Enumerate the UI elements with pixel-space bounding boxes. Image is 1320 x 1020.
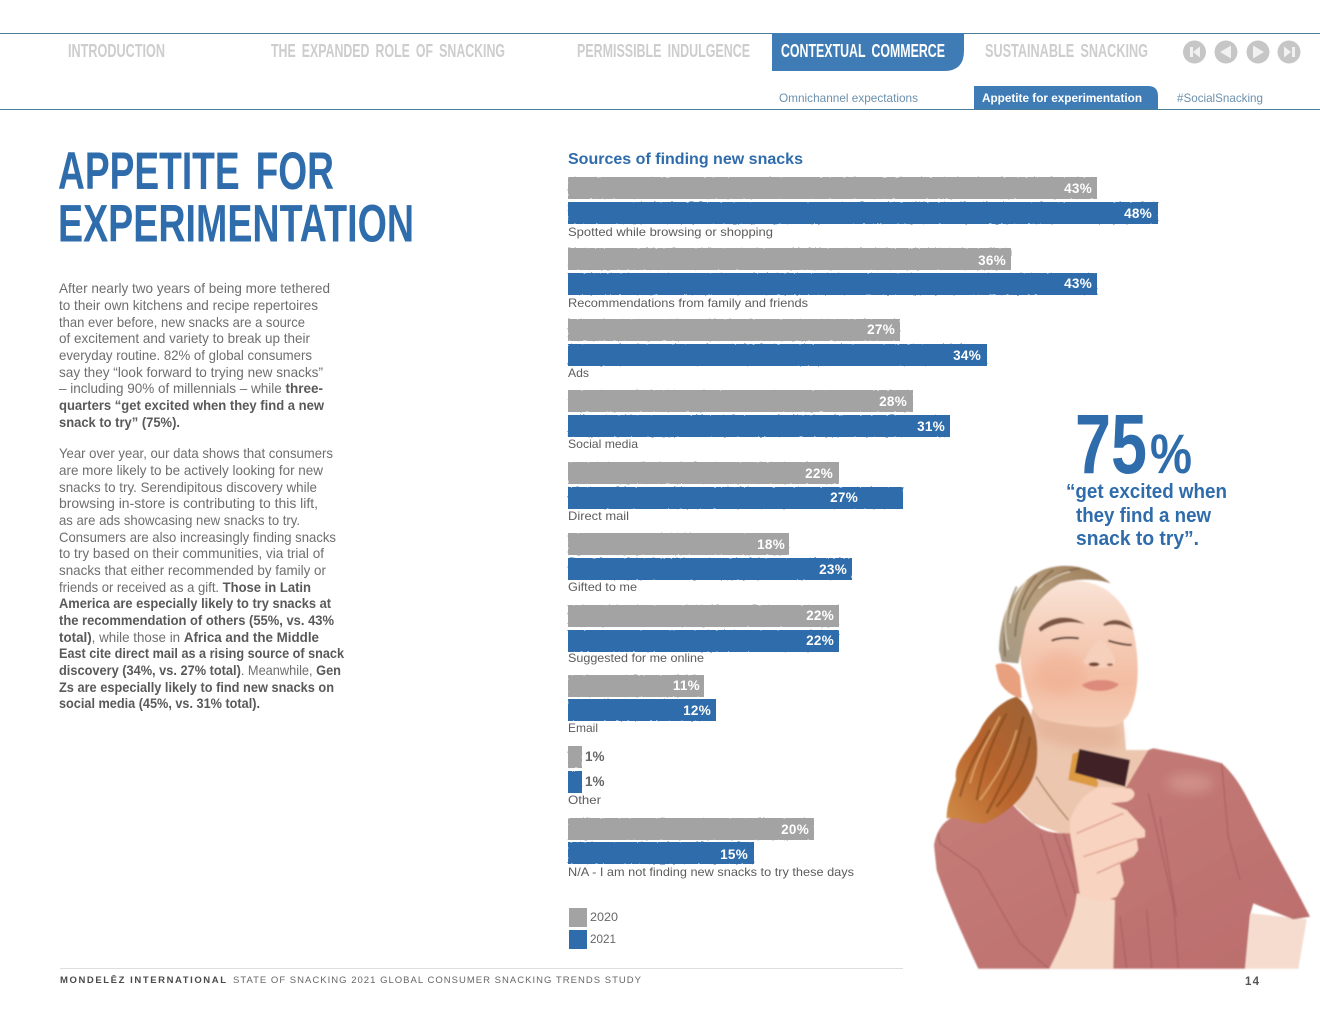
row: email — [568, 675, 716, 735]
text block: first paragraph: quarters “get excited when they find a new — [59, 397, 324, 413]
text block: second paragraph: Consumers are also increasingly finding snacks — [59, 529, 336, 545]
row: other: 1% — [585, 774, 605, 789]
callout: 75 percent: snack to try”. — [1076, 528, 1199, 550]
blouse folds — [938, 763, 1240, 968]
row: ads: Ads — [568, 366, 589, 380]
row: ads — [568, 319, 987, 380]
row: social media: 31% — [917, 419, 945, 434]
row: spotted while browsing: 48% — [1124, 206, 1152, 221]
text block: second paragraph: Zs are especially likely to find new snacks on — [59, 679, 334, 695]
callout: 75 percent: “get excited when — [1066, 481, 1227, 503]
nav item: introduction: INTRODUCTION — [68, 40, 165, 61]
row: suggested online: Suggested for me online — [568, 651, 704, 665]
eyes — [1052, 638, 1132, 645]
eyebrows — [1038, 618, 1085, 632]
row: spotted while browsing — [568, 177, 1158, 239]
chocolate — [1075, 749, 1130, 787]
row: recommendations: Recommendations from family and friends — [568, 296, 808, 310]
row: recommendations — [568, 248, 1097, 310]
row: suggested online: 22% — [806, 608, 834, 623]
hair top — [999, 566, 1111, 663]
text block: second paragraph: snacks that either recommended by family or — [59, 562, 326, 578]
callout: 75 percent: they find a new — [1076, 505, 1211, 527]
row: direct mail — [568, 462, 903, 523]
text block: first paragraph: snack to try” (75%). — [59, 414, 180, 430]
text block: second paragraph: the recommendation of others (55%, vs. 43% — [59, 612, 335, 628]
face — [1020, 581, 1138, 727]
text block: first paragraph: to their own kitchens and recipe repertoires — [59, 297, 318, 313]
icon: next page button — [1246, 40, 1270, 64]
nav item: permissible indulgence: PERMISSIBLE INDULGENCE — [577, 40, 750, 61]
row: gifted to me — [568, 533, 852, 594]
bar chart: sources of finding new snacks — [568, 177, 1158, 879]
row: email: 11% — [673, 678, 700, 693]
row: not finding new snacks: N/A - I am not finding new snacks to try these days — [568, 865, 854, 879]
nav item: expanded role: THE EXPANDED ROLE OF SNACKING — [271, 40, 505, 61]
subnav tab: appetite for experimentation active: Appetite for experimentation — [982, 91, 1142, 105]
navigation bar — [0, 33, 1320, 110]
cheek blush — [1035, 652, 1085, 695]
row: social media: Social media — [568, 437, 638, 451]
text block: second paragraph: friends or received as a gift. Those in Latin — [59, 579, 311, 595]
blouse — [934, 748, 1310, 969]
row: email: 12% — [683, 703, 711, 718]
text block: second paragraph: East cite direct mail as a rising source of snack — [59, 645, 344, 661]
subnav tab: appetite for experimentation active — [974, 86, 1158, 109]
title — [58, 142, 414, 254]
row: direct mail: Direct mail — [568, 509, 629, 523]
footer study title: STATE OF SNACKING 2021 GLOBAL CONSUMER SNACKING TRENDS STUDY — [233, 975, 642, 986]
row: ads: 34% — [953, 348, 981, 363]
row: gifted to me: Gifted to me — [568, 580, 637, 594]
forearm — [1049, 893, 1115, 969]
text block: first paragraph: – including 90% of millennials – while three- — [59, 380, 323, 396]
nav tab: contextual commerce active — [772, 33, 964, 71]
callout: 75 percent: % — [1150, 422, 1192, 485]
text block: second paragraph: social media (45%, vs. 31% total). — [59, 695, 260, 711]
icon: last page button — [1278, 40, 1300, 64]
neck and chest — [1007, 700, 1150, 837]
far arm — [1245, 913, 1307, 969]
text block: first paragraph: of excitement and variety to break up their — [59, 330, 310, 346]
row: email: Email — [568, 721, 598, 735]
row: gifted to me: 18% — [757, 537, 785, 552]
biscuit — [1068, 750, 1098, 787]
title: APPETITE FOR — [58, 142, 334, 201]
row: recommendations: 43% — [1064, 276, 1092, 291]
text block: second paragraph: Year over year, our data shows that consumers — [59, 445, 333, 461]
text block: second paragraph: to try based on their communities, via trial of — [59, 545, 324, 561]
callout: 75 percent — [1066, 397, 1227, 550]
legend — [569, 908, 618, 949]
row: suggested online: 22% — [806, 633, 834, 648]
neck shadow — [1033, 710, 1120, 749]
row: not finding new snacks: 15% — [720, 847, 748, 862]
text block: first paragraph: say they “look forward to trying new snacks” — [59, 364, 323, 380]
row: other: 1% — [585, 749, 605, 764]
row: gifted to me: 23% — [819, 562, 847, 577]
row: direct mail: 22% — [805, 466, 833, 481]
row: other — [568, 746, 605, 807]
nav tab: contextual commerce active: CONTEXTUAL COMMERCE — [781, 40, 945, 61]
page number: 14 — [1245, 976, 1260, 988]
chart title: Sources of finding new snacks — [568, 151, 803, 168]
row: direct mail: 27% — [830, 490, 858, 505]
row: not finding new snacks: 20% — [781, 822, 809, 837]
icon: first page button — [1183, 40, 1206, 64]
ear — [995, 663, 1022, 698]
row: spotted while browsing: 43% — [1064, 181, 1092, 196]
subnav: omnichannel expectations: Omnichannel expectations — [779, 91, 918, 105]
title: EXPERIMENTATION — [58, 194, 414, 254]
text block: second paragraph: discovery (34%, vs. 27% total). Meanwhile, Gen — [59, 662, 341, 678]
icon: previous page button — [1214, 40, 1238, 64]
lips — [1082, 680, 1119, 691]
text block: first paragraph: everyday routine. 82% of global consumers — [59, 347, 312, 363]
photo: woman tasting a chocolate biscuit — [934, 566, 1310, 969]
row: ads: 27% — [867, 322, 895, 337]
legend: 2020 — [590, 910, 618, 924]
text block: second paragraph: as are ads showcasing new snacks to try. — [59, 512, 300, 528]
callout: 75 percent: 75 — [1075, 397, 1147, 491]
text block: second paragraph: are more likely to be actively looking for new — [59, 462, 324, 478]
text block: second paragraph: snacks to try. Serendipitous discovery while — [59, 479, 317, 495]
nav item: sustainable snacking: SUSTAINABLE SNACKING — [985, 40, 1148, 61]
hand creases — [1077, 813, 1137, 873]
footer brand: MONDELĒZ INTERNATIONAL — [60, 975, 226, 986]
row: not finding new snacks — [568, 818, 854, 879]
footer — [60, 968, 1260, 988]
text block: first paragraph: than ever before, new snacks are a source — [59, 314, 305, 330]
text block: second paragraph: total), while those in Africa and the Middle — [59, 629, 319, 645]
hand — [1070, 787, 1145, 902]
row: social media: 28% — [879, 394, 907, 409]
text block: second paragraph: America are especially likely to try snacks at — [59, 595, 331, 611]
necklace — [1036, 777, 1068, 820]
subnav: social snacking: #SocialSnacking — [1177, 91, 1263, 105]
row: social media — [568, 390, 950, 451]
nose — [1083, 638, 1115, 668]
row: other: Other — [568, 793, 601, 807]
row: recommendations: 36% — [978, 253, 1006, 268]
text block: first paragraph — [59, 280, 330, 430]
row: spotted while browsing: Spotted while browsing or shopping — [568, 225, 773, 239]
ponytail — [947, 697, 1037, 824]
blouse highlight — [1167, 773, 1213, 793]
text block: second paragraph: browsing in-store is contributing to this lift, — [59, 495, 318, 511]
row: suggested online — [568, 605, 839, 665]
text block: first paragraph: After nearly two years of being more tethered — [59, 280, 330, 296]
legend: 2021 — [590, 932, 616, 946]
text block: second paragraph — [59, 445, 344, 711]
